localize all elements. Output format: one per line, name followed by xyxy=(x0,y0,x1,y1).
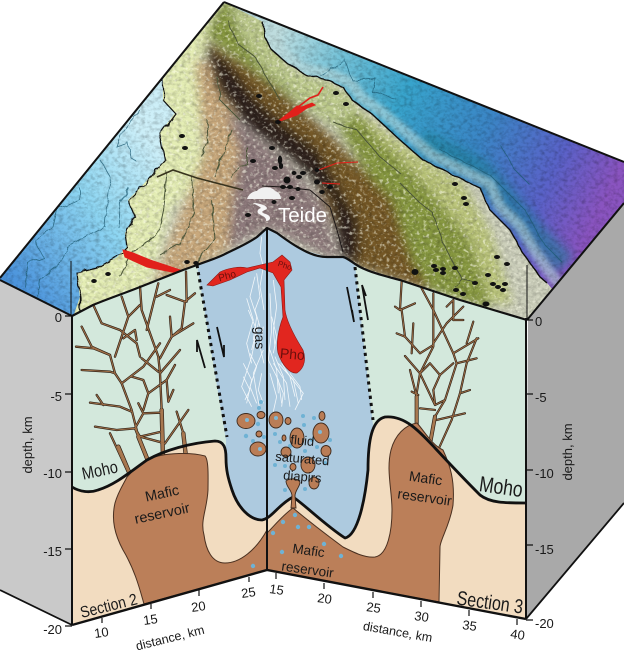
left dotted fault xyxy=(197,265,227,437)
central vertical edge xyxy=(266,228,268,570)
text labels: right depth axis: -20 xyxy=(535,616,554,631)
right dotted fault xyxy=(355,267,373,420)
right axis title: distance, km xyxy=(362,619,433,645)
brown flank xyxy=(205,40,432,292)
label: left mafic reservoir: reservoir xyxy=(133,500,191,528)
left distance axis numbers xyxy=(93,584,257,641)
blue magma body xyxy=(197,228,373,560)
text labels: left depth axis: -10 xyxy=(43,466,62,481)
label: right mafic reservoir: Mafic xyxy=(408,468,443,488)
third lava flow xyxy=(322,183,340,184)
deep teal slope along the south coast xyxy=(420,140,565,265)
tan mantle xyxy=(72,417,526,625)
text labels: left depth axis: 0 xyxy=(55,310,62,325)
right distance axis numbers: 30 xyxy=(413,608,430,625)
phonolite magma body xyxy=(207,255,305,373)
panel: topographic map surface xyxy=(0,0,624,330)
text labels: right depth axis: -10 xyxy=(535,466,554,481)
axis title: left depth: depth, km xyxy=(20,416,35,474)
lava flows on map xyxy=(123,87,358,273)
label: gas: gas xyxy=(252,327,268,349)
label: Pho lower: Pho xyxy=(279,345,306,363)
text labels: left depth axis: -5 xyxy=(50,389,62,404)
label: Moho left: Moho xyxy=(80,458,120,484)
text labels: left depth axis: -15 xyxy=(43,544,62,559)
upper lava flow xyxy=(298,87,323,107)
land contour lines xyxy=(120,20,478,287)
icon: eruption cloud over Teide xyxy=(247,187,281,221)
left dike network xyxy=(76,272,195,478)
label: Pho left: Pho xyxy=(217,269,238,284)
panel: right grey side wall xyxy=(526,203,624,619)
label: Pho small: Pho xyxy=(277,259,293,272)
left distance axis numbers: 10 xyxy=(93,624,110,641)
arrow: right fault up xyxy=(362,285,368,320)
volcanic vents: black dots xyxy=(91,91,510,306)
label: central mafic reservoir: Mafic xyxy=(292,541,326,560)
right dike network xyxy=(395,282,478,453)
arrow: left fault down xyxy=(217,327,224,357)
pale shelf along the coast xyxy=(284,54,562,288)
text labels: left depth axis: -20 xyxy=(43,622,62,637)
coastlines xyxy=(263,22,548,284)
arrow: left fault up xyxy=(197,340,205,368)
surface outline xyxy=(72,228,527,320)
pale green crust xyxy=(72,228,526,510)
label: Moho right: Moho xyxy=(478,472,524,503)
central and right mafic reservoir xyxy=(267,423,453,602)
fluid bubbles xyxy=(244,400,343,568)
text labels: right depth axis: -15 xyxy=(535,542,554,557)
dark ridge xyxy=(203,46,360,264)
Moho boundary line xyxy=(72,417,526,538)
bubble highlights in diapirs xyxy=(245,416,322,451)
west yellow slopes xyxy=(74,7,223,314)
left distance axis numbers: 20 xyxy=(190,598,207,615)
gas streaks xyxy=(242,237,303,412)
text labels: right depth axis: 0 xyxy=(535,314,542,329)
left ocean xyxy=(0,79,174,315)
second lava flow xyxy=(316,162,358,171)
olive slopes xyxy=(205,0,490,310)
right distance axis numbers xyxy=(268,581,526,643)
right distance axis numbers: 35 xyxy=(461,617,478,634)
text labels: left depth axis xyxy=(43,310,62,637)
purple-grey caldera xyxy=(225,110,338,258)
yellow-green eastern slopes xyxy=(350,105,512,305)
fine relief shading xyxy=(0,0,624,325)
axis title: right depth: depth, km xyxy=(560,423,575,481)
text labels: right depth axis: -5 xyxy=(535,390,547,405)
text labels: right depth axis xyxy=(535,314,554,631)
label: left mafic reservoir xyxy=(133,483,191,528)
panel: cross-section Sections 2 and 3 xyxy=(72,228,527,625)
ocean contour lines xyxy=(25,60,562,300)
pale speckle on slopes xyxy=(75,3,550,318)
label: central mafic reservoir xyxy=(281,541,335,581)
label: right mafic reservoir: reservoir xyxy=(397,485,453,509)
left mafic reservoir xyxy=(113,453,267,604)
panel: left grey side wall xyxy=(0,280,72,625)
left lava flow xyxy=(123,250,180,273)
right distance axis numbers: 15 xyxy=(268,581,285,598)
right distance axis numbers: 25 xyxy=(365,599,382,616)
label: fluid saturated diapirs xyxy=(275,432,330,486)
right distance axis numbers: 40 xyxy=(509,626,526,643)
tan highlands xyxy=(153,60,240,288)
axis ticks xyxy=(65,316,533,626)
label: right mafic reservoir xyxy=(397,468,453,509)
label: Section 3: Section 3 xyxy=(455,587,524,618)
right distance axis numbers: 20 xyxy=(316,590,333,607)
left distance axis numbers: 15 xyxy=(142,611,159,628)
label: central mafic reservoir: reservoir xyxy=(281,558,335,581)
label: fluid saturated diapirs: fluid xyxy=(290,432,315,449)
island land and terrain bands xyxy=(74,3,552,318)
label: Teide: Teide xyxy=(278,204,327,227)
left distance axis numbers: 25 xyxy=(240,584,257,601)
label: fluid saturated diapirs: saturated xyxy=(275,449,330,468)
right ocean xyxy=(234,7,624,288)
label: fluid saturated diapirs: diapirs xyxy=(283,467,323,486)
arrow: right fault down xyxy=(347,287,354,322)
fluid saturated diapirs xyxy=(237,412,331,508)
road across island xyxy=(157,170,243,190)
label: Section 2: Section 2 xyxy=(78,590,139,622)
label: left mafic reservoir: Mafic xyxy=(144,483,181,505)
caldera rim xyxy=(262,186,343,252)
pale green northern slopes xyxy=(228,0,358,128)
